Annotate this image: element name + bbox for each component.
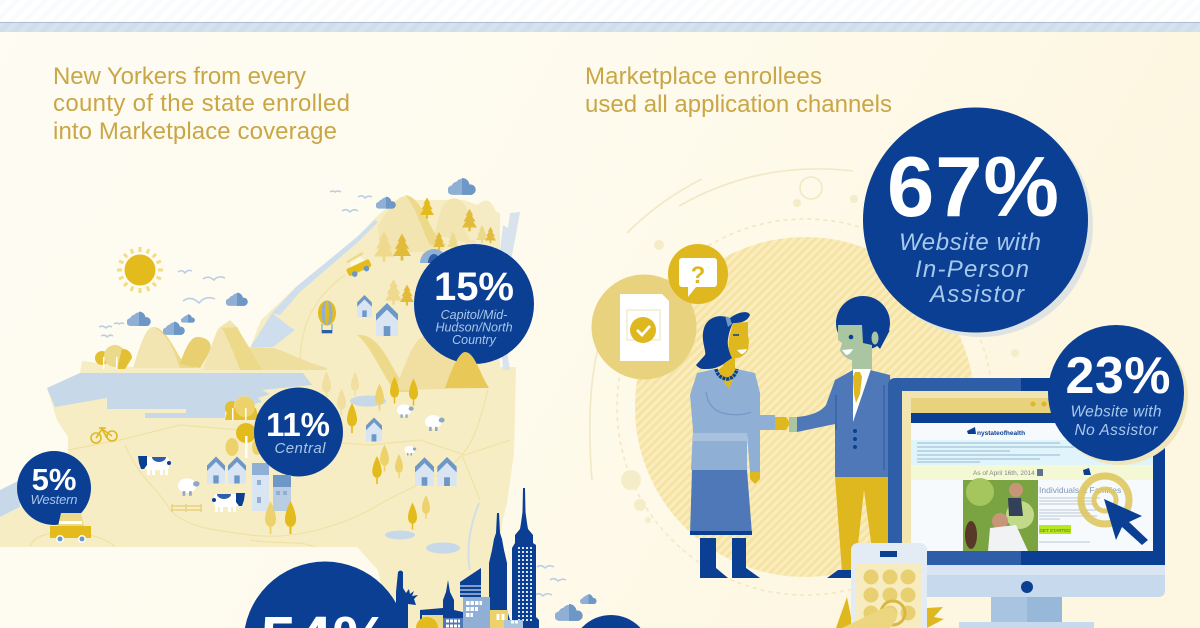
icon: question speech bubble (668, 244, 728, 304)
man face and neck (838, 325, 872, 370)
website text: Individuals & Families (1039, 485, 1121, 495)
taxi car (50, 513, 91, 543)
cows (138, 456, 245, 512)
central tree cluster (225, 396, 262, 458)
phone body (851, 543, 927, 628)
striped office tower (460, 568, 481, 597)
New York City skyline (396, 488, 539, 628)
blue circle: 11% Central: Central (274, 440, 326, 457)
heading: county enrollment: New Yorkers from every (53, 63, 306, 90)
woman necklace (716, 369, 737, 379)
blue circle: 67%: In-Person (915, 256, 1029, 283)
screen: GET STARTED (1039, 528, 1071, 533)
blue circle: 5% Western: Western (30, 492, 78, 507)
skyscraper windows (519, 547, 531, 621)
birds (99, 191, 566, 596)
blue circle: 67%: Assistor (928, 281, 1025, 308)
alert band (911, 440, 1153, 465)
blue circle: 5% Western: 5% (32, 462, 76, 497)
screen (902, 391, 1153, 551)
ponds (350, 396, 460, 554)
small city buildings (422, 610, 523, 628)
map land shape (0, 200, 516, 628)
heading: application channels: Marketplace enrollees (585, 63, 822, 90)
blue circle: 11% Central (254, 388, 343, 476)
observatory dome (420, 249, 448, 263)
jacket buttons (853, 429, 857, 449)
monitor bezel (888, 378, 1021, 565)
date band (911, 465, 1153, 480)
blue circle: 67%: Website with (899, 229, 1041, 256)
blue circle: 67%: 67% (887, 140, 1059, 235)
monitor stand (991, 597, 1027, 622)
blue circle: 15% Capitol: Capitol/Mid- (441, 308, 507, 322)
St Lawrence river (250, 220, 378, 348)
woman hair (696, 312, 750, 369)
browser bar (911, 398, 1153, 413)
right skyscraper (512, 488, 539, 628)
town buildings (252, 463, 269, 511)
blue circle: 23%: 23% (1066, 347, 1170, 405)
poplar overlapping building (285, 501, 296, 534)
man pants (835, 477, 888, 572)
Lake Ontario (47, 373, 312, 418)
sun (117, 247, 163, 293)
church tower and base (420, 580, 463, 628)
get started button (1039, 525, 1071, 534)
power button (1021, 581, 1033, 593)
woman skirt (690, 470, 752, 534)
left hills (133, 320, 327, 370)
touching finger (842, 601, 905, 628)
blue circle: 15% Capitol: Country (452, 333, 497, 347)
light blue building with windows (463, 597, 490, 628)
blue circle bottom partial (571, 615, 651, 628)
man figure (789, 296, 893, 578)
site header (911, 413, 1153, 423)
man shoe (827, 570, 855, 578)
blue circle: 15% Capitol: 15% (434, 265, 514, 309)
woman boots (700, 538, 760, 578)
blue circle: 67% (863, 108, 1093, 337)
heading: application channels: used all application channels (585, 91, 892, 118)
poplar trees (265, 372, 430, 534)
man jacket (797, 370, 893, 477)
roads and county lines (30, 275, 510, 547)
Empire State spire (489, 513, 510, 628)
blue circle: 54% (244, 562, 406, 628)
target rings (1081, 476, 1129, 524)
sheep (178, 404, 445, 496)
blue circle: 5% Western (17, 451, 91, 525)
hill overlapping 15% circle (446, 352, 489, 388)
houses (207, 295, 457, 486)
blue circle: 15% Capitol: Hudson/North (435, 320, 513, 334)
fence (171, 504, 202, 512)
blue circle: 23% (1048, 325, 1188, 465)
woman face (728, 322, 749, 358)
keypad dots (864, 570, 916, 620)
pine trees (374, 198, 496, 306)
hatched yellow circle backdrop (635, 237, 975, 577)
icon: document with checkmark (592, 274, 696, 380)
blue circle: 11% Central: 11% (266, 406, 330, 443)
woman neck and collar (716, 356, 738, 389)
monitor foot (959, 622, 1094, 628)
top stripe header band (0, 0, 1200, 32)
bicycle (91, 428, 117, 443)
tree cluster by hills (95, 345, 132, 369)
blue circle: 23%: No Assistor (1074, 422, 1158, 439)
site logo: nystateofhealth (977, 430, 1025, 437)
car on northern road (342, 251, 373, 279)
woman figure (690, 312, 790, 578)
site logo (967, 427, 1025, 437)
man hair (836, 296, 890, 350)
building overlapping 11% circle (273, 475, 291, 511)
tree in front of city (416, 617, 438, 628)
hand rays (836, 597, 944, 628)
monitor (888, 378, 1165, 628)
Lake Erie (0, 480, 20, 517)
blue circle: 15% Capitol (414, 244, 534, 364)
woman sweater (690, 369, 775, 472)
Statue of Liberty (396, 570, 418, 628)
man shirt and tie (853, 369, 871, 422)
cursor arrow (1104, 499, 1148, 545)
hot air balloon (318, 300, 336, 333)
icon: question speech bubble: ? (691, 262, 705, 289)
central hills (357, 335, 489, 392)
northern hills (378, 195, 500, 255)
blue circle: 23%: Website with (1070, 404, 1162, 420)
phone screen (856, 563, 922, 628)
screen: As of April 16th, 2014 (973, 470, 1035, 477)
Hudson river (468, 503, 479, 570)
heading: county enrollment: county of the state enrolled (53, 90, 350, 117)
photo (963, 478, 1038, 551)
map of New York state (0, 178, 597, 628)
man hand (789, 417, 797, 432)
monitor base panel (888, 565, 1165, 597)
decorative arcs and dots (590, 169, 1019, 595)
woman hands (750, 417, 790, 484)
phone with hand (836, 543, 944, 628)
heading: county enrollment: into Marketplace coverage (53, 118, 337, 145)
clouds (127, 178, 597, 621)
Lake Champlain (500, 212, 520, 370)
